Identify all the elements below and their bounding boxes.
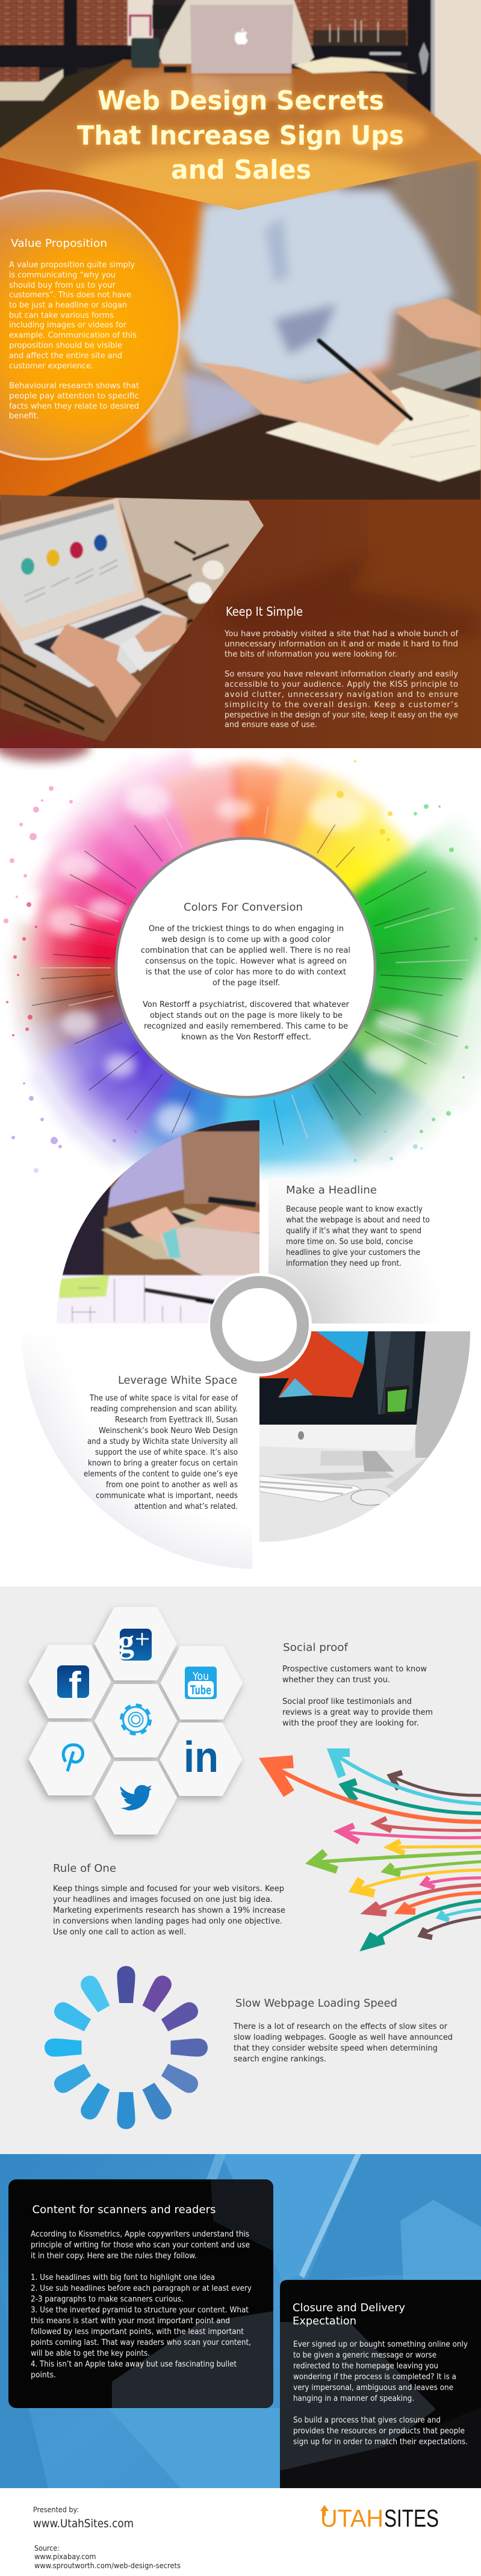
footer: presented by: www.UtahSites.com [33, 2517, 134, 2530]
text: keep it simple body: and ensure ease of use. [225, 720, 317, 729]
heading: leverage white space: Leverage White Space [118, 1374, 237, 1387]
panel: closure and delivery expectation [280, 2280, 481, 2488]
text: rule of one body: Use only one call to action as well. [53, 1928, 186, 1937]
text: leverage white space body: from one point to another as well as [106, 1481, 238, 1490]
icon: facebook: f [69, 1665, 81, 1706]
text: make a headline body: headlines to give your customers the [286, 1248, 420, 1257]
text: value proposition body: facts when they relate to desired [9, 402, 139, 411]
footer: sources: Source: [34, 2544, 60, 2553]
text: leverage white space body: reading comprehension and scan ability. [90, 1405, 238, 1414]
text: slow webpage body: search engine rankings. [234, 2055, 326, 2064]
ring: center circle [208, 1273, 312, 1376]
text: scanners body: 2-3 paragraphs to make scanners curious. [31, 2295, 184, 2304]
text: value proposition body [9, 261, 139, 421]
hero photo: laptop on wooden table [0, 0, 481, 214]
text: slow webpage body [233, 2022, 453, 2064]
text: rule of one body: in conversions when landing pages had only one objective. [53, 1917, 282, 1926]
text: closure body: Ever signed up or bought something online only [293, 2340, 468, 2349]
text: closure body [293, 2340, 468, 2447]
text: keep it simple body: perspective in the design of your site, keep it easy on the eye [225, 711, 458, 720]
text: closure body: hanging in a manner of speaking. [293, 2394, 414, 2403]
text: leverage white space body: The use of white space is vital for ease of [89, 1394, 238, 1403]
heading: slow webpage loading speed: Slow Webpage Loading Speed [235, 1997, 397, 2010]
text: value proposition body: customer experience. [9, 362, 93, 371]
text: social proof body: Prospective customers want to know [282, 1665, 427, 1674]
photo: desktop computer [259, 1331, 481, 1545]
text: slow webpage body: that they consider website speed when determining [234, 2044, 438, 2053]
icon: youtube [185, 1667, 217, 1699]
text: leverage white space body: communicate what is important, needs [96, 1491, 238, 1500]
text: closure body: sign up for in order to match their expectations. [293, 2438, 468, 2447]
text: value proposition body: including images or videos for [9, 321, 127, 330]
title: Web Design Secrets [98, 85, 384, 116]
text: closure body: So build a process that gives closure and [293, 2416, 441, 2425]
logo: utah sites: UTAH [320, 2504, 383, 2532]
text: leverage white space body: attention and what’s related. [134, 1502, 238, 1511]
green glow on right [376, 861, 481, 993]
text: closure body: very impersonal, ambiguous and leaves one [293, 2383, 453, 2392]
panel: value proposition background with orange field and writing photo [0, 150, 481, 501]
icon: facebook [57, 1665, 89, 1698]
text: leverage white space body: known to bring a greater focus on certain [88, 1459, 238, 1468]
circle: value proposition [0, 191, 179, 459]
text: value proposition body: and affect the entire site and [9, 351, 122, 361]
icon: linkedin: in [184, 1733, 219, 1782]
text: scanners body: 4. This isn’t an Apple take away but use fascinating bullet [31, 2360, 237, 2369]
text: closure body: redirected to the homepage leaving you [293, 2362, 438, 2371]
text: value proposition body: A value proposition quite simply [9, 261, 135, 270]
heading: closure and delivery expectation: Closure and Delivery [293, 2302, 405, 2314]
icon: google plus: g [118, 1623, 134, 1659]
text: scanners body: According to Kissmetrics, Apple copywriters understand this [31, 2230, 249, 2239]
icon: google plus [120, 1629, 152, 1661]
title: and Sales [171, 155, 311, 185]
text: value proposition body: should buy from us to your [9, 281, 116, 290]
text: value proposition body: proposition should be visible [9, 341, 122, 350]
heading: closure and delivery expectation [293, 2302, 405, 2327]
text: rule of one body: Marketing experiments research has shown a 19% increase [53, 1906, 285, 1915]
hexagon social icons [29, 1607, 243, 1834]
panel: content for scanners and readers [8, 2179, 273, 2408]
logo: utah sites: SITES [384, 2504, 439, 2532]
text: rule of one body [53, 1884, 285, 1937]
text: colors for conversion body [141, 924, 350, 1042]
text: leverage white space body: support the use of white space. It’s also [95, 1448, 238, 1457]
text: social proof body [282, 1665, 433, 1728]
loading spinner [45, 1966, 208, 2129]
heading: closure and delivery expectation: Expectation [293, 2315, 356, 2327]
text: keep it simple body: simplicity to the overall design. Keep a customer’s [225, 701, 458, 710]
text: scanners body: will be able to get the key points. [31, 2349, 150, 2358]
soft fade at wheel edge [0, 748, 481, 1206]
text: scanners body: principle of writing for those who scan your content and use [31, 2241, 250, 2250]
text: value proposition body: Behavioural research shows that [9, 382, 139, 391]
footer: presented by: Presented by: [33, 2505, 79, 2514]
heading: make a headline: Make a Headline [286, 1184, 377, 1197]
text: scanners body: points. [31, 2371, 56, 2380]
text: value proposition body: to be just a headline or slogan [9, 301, 127, 310]
title: That Increase Sign Ups [77, 120, 404, 151]
logo: utah sites [320, 2504, 439, 2532]
text: keep it simple body: You have probably visited a site that had a whole bunch of [224, 630, 458, 639]
hexagons [29, 1607, 243, 1834]
text: colors for conversion body: recognized and easily remembered. This came to be [144, 1022, 348, 1031]
text: value proposition body: but can take various forms [9, 311, 114, 320]
text: keep it simple body: unnecessary information on it and or made it hard to find [225, 640, 458, 649]
text: colors for conversion body: object stands out on the page is more likely to be [150, 1011, 343, 1020]
icon: pinterest [63, 1745, 82, 1771]
heading: keep it simple: Keep It Simple [226, 604, 303, 619]
white fade over top of quadrant edge [0, 1327, 181, 1393]
text: keep it simple body: So ensure you have relevant information clearly and easily [225, 670, 458, 679]
text: keep it simple body: avoid clutter, unnecessary navigation and to ensure [225, 690, 458, 699]
text: social proof body: with the proof they are looking for. [282, 1719, 419, 1728]
text: make a headline body [286, 1205, 430, 1268]
quadrant: leverage white space background [22, 1331, 252, 1569]
heading: content for scanners and readers: Content for scanners and readers [33, 2203, 216, 2216]
text: colors for conversion body: is that the use of color has more to do with context [146, 968, 346, 977]
text: make a headline body: qualify if it’s what they want to spend [286, 1227, 421, 1236]
text: leverage white space body [84, 1394, 238, 1511]
text: scanners body: 3. Use the inverted pyramid to structure your content. What [31, 2306, 249, 2315]
text: social proof body: reviews is a great way to provide them [282, 1708, 433, 1717]
text: leverage white space body: Research from Eyettrack III, Susan [115, 1416, 238, 1425]
text: slow webpage body: There is a lot of research on the effects of slow sites or [233, 2022, 448, 2031]
text: scanners body: followed by less important points, with the least important [31, 2327, 244, 2336]
text: colors for conversion body: One of the trickiest things to do when engaging in [149, 924, 344, 933]
text: colors for conversion body: of the page itself. [213, 979, 280, 988]
text: closure body: provides the resources or products that people [293, 2427, 465, 2436]
icon: twitter [120, 1785, 152, 1810]
photo: hands on laptop with notes [54, 1116, 262, 1327]
text: value proposition body: is communicating “why you [9, 271, 116, 280]
heading: colors for conversion: Colors For Conversion [184, 901, 303, 914]
text: colors for conversion body: combination that can be applied well. There is no real [141, 946, 350, 955]
text: colors for conversion body: Von Restorff a psychiatrist, discovered that whatever [143, 1000, 350, 1009]
footer: sources [34, 2544, 181, 2570]
text: scanners body [31, 2230, 252, 2380]
text: keep it simple body: accessible to your audience. Apply the KISS principle to [225, 680, 458, 689]
photo: man writing in notebook [36, 158, 481, 501]
text: make a headline body: information they need up front. [286, 1259, 402, 1268]
text: scanners body: points coming last. That way readers who scan your content, [31, 2338, 251, 2347]
text: rule of one body: Keep things simple and focused for your web visitors. Keep [53, 1884, 284, 1893]
footer: sources: www.pixabay.com [34, 2553, 96, 2561]
text: scanners body: 2. Use sub headlines before each paragraph or at least every [31, 2284, 252, 2293]
icon: settings gear [122, 1705, 151, 1734]
text: social proof body: Social proof like testimonials and [282, 1697, 412, 1706]
text: scanners body: 1. Use headlines with big font to highlight one idea [31, 2273, 215, 2282]
white mottling in paint [48, 784, 421, 1135]
text: make a headline body: what the webpage is about and need to [286, 1216, 430, 1225]
text: value proposition body: example. Communication of this [9, 331, 137, 340]
footer: sources: www.sproutworth.com/web-design-secrets [34, 2562, 181, 2570]
text: colors for conversion body: web design is to come up with a good color [161, 935, 331, 944]
heading: rule of one: Rule of One [53, 1862, 116, 1875]
text: rule of one body: your headlines and images focused on one just big idea. [53, 1895, 273, 1904]
paint splatter [4, 760, 477, 1173]
paint streaks [32, 803, 468, 1144]
photo: laptop on slatted table [0, 491, 268, 746]
text: slow webpage body: slow loading webpages. Google as well have announced [234, 2033, 453, 2042]
panel: keep it simple [0, 491, 481, 761]
footer: presented by [33, 2505, 134, 2530]
text: closure body: wondering if the process is completed? It is a [293, 2373, 456, 2382]
text: scanners body: this means is start with your most important point and [31, 2317, 230, 2326]
text: keep it simple body: the bits of information you were looking for. [225, 650, 397, 659]
text: scanners body: it in their copy. Here are the rules they follow. [31, 2252, 197, 2261]
panel: gray social section background [0, 1587, 481, 2154]
color wheel [0, 743, 481, 1207]
arrows: colorful curved burst [270, 1753, 481, 1945]
heading: value proposition: Value Proposition [11, 237, 107, 250]
title [77, 85, 404, 185]
text: colors for conversion body: known as the Von Restorff effect. [181, 1033, 311, 1042]
text: leverage white space body: elements of the content to guide one’s eye [84, 1470, 238, 1479]
text: value proposition body: benefit. [9, 412, 39, 421]
text: keep it simple body [224, 630, 458, 729]
text: leverage white space body: and a study by Wichita state University all [87, 1437, 238, 1446]
quadrant: make a headline background [268, 1178, 481, 1324]
panel: blue photo background [0, 2154, 481, 2488]
text: value proposition body: customers”. This does not have [9, 291, 131, 300]
icon: youtube: You [192, 1670, 209, 1683]
color wedges [8, 743, 481, 1200]
text: social proof body: whether they can trust you. [282, 1676, 390, 1685]
circle: colors for conversion [116, 838, 375, 1097]
text: leverage white space body: Weinschenk’s book Neuro Web Design [99, 1426, 238, 1435]
text: make a headline body: Because people want to know exactly [286, 1205, 423, 1214]
text: make a headline body: more time on. So use bold, concise [286, 1237, 413, 1246]
text: closure body: to be given a generic message or worse [293, 2351, 436, 2360]
icon: youtube: Tube [190, 1683, 211, 1697]
text: value proposition body: people pay attention to specific [9, 392, 139, 401]
text: colors for conversion body: consensus on the topic. However what is agreed on [145, 957, 347, 966]
heading: social proof: Social proof [283, 1641, 349, 1654]
